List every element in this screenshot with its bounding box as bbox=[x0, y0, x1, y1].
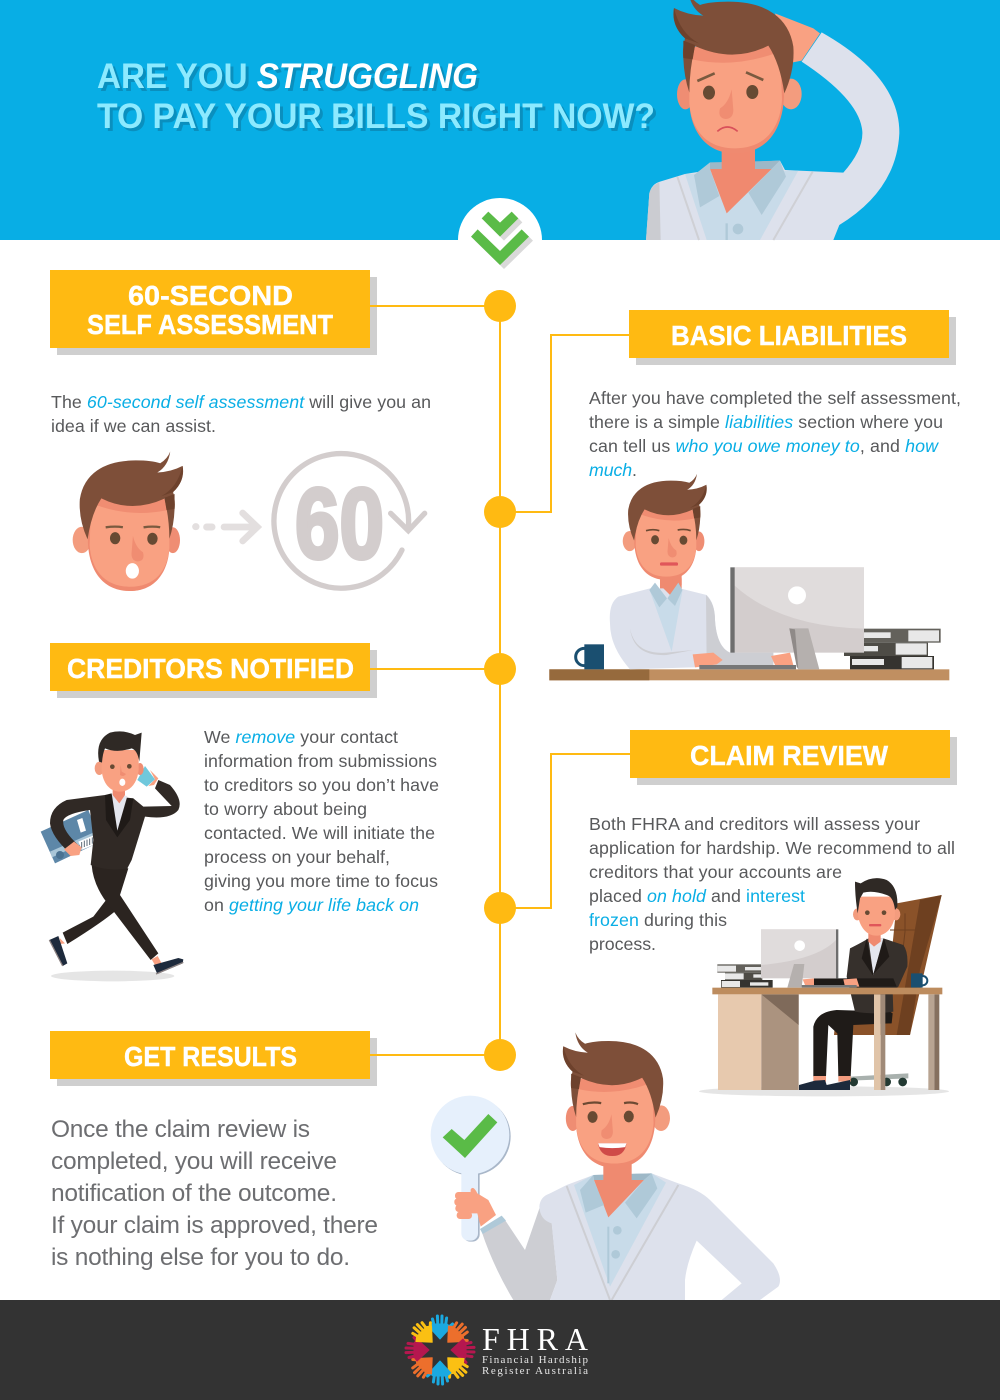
text: self assessment bbox=[51, 392, 431, 436]
text: claim review: frozen during this bbox=[589, 910, 727, 930]
text: claim review: placed on hold and interest bbox=[589, 886, 805, 906]
heading: 60-second self assessment: 60-SECOND bbox=[128, 280, 293, 311]
book bbox=[41, 810, 101, 863]
computer bbox=[699, 567, 864, 669]
jacket and arms bbox=[50, 780, 180, 869]
arm bbox=[482, 1207, 557, 1300]
character: man at computer bbox=[549, 474, 949, 680]
text: creditors notified: on getting your life back on bbox=[204, 895, 419, 915]
text: creditors notified: giving you more time to focus bbox=[204, 871, 438, 891]
text: get results: is nothing else for you to do. bbox=[51, 1244, 350, 1271]
man bbox=[610, 570, 793, 669]
text: creditors notified bbox=[204, 727, 439, 915]
head bbox=[853, 878, 900, 947]
character: happy man with check sign bbox=[431, 1096, 780, 1300]
text: creditors notified: to creditors so you don’t have bbox=[204, 775, 439, 795]
character: worried man scratching head bbox=[646, 0, 899, 240]
text: claim review: Both FHRA and creditors will assess your bbox=[589, 814, 920, 834]
chair bbox=[834, 895, 942, 1086]
text: claim review: application for hardship. We recommend to all bbox=[589, 838, 955, 858]
shoes bbox=[49, 936, 183, 974]
text: get results: completed, you will receive bbox=[51, 1148, 337, 1175]
heading: get results bbox=[50, 1031, 377, 1086]
head bbox=[95, 731, 144, 803]
footer band bbox=[0, 1300, 1000, 1400]
man bbox=[799, 938, 907, 1090]
book stack bbox=[844, 629, 941, 669]
computer bbox=[761, 929, 857, 988]
text: creditors notified: We remove your contact bbox=[204, 727, 398, 747]
icon: dotted arrow bbox=[196, 513, 257, 541]
header title: ARE YOU STRUGGLING bbox=[97, 57, 478, 96]
header band bbox=[0, 0, 1000, 240]
icon: mug bbox=[576, 644, 604, 669]
text: get results: Once the claim review is bbox=[51, 1116, 310, 1143]
legs bbox=[63, 865, 158, 960]
text: basic liabilities: there is a simple liabilities section where you bbox=[589, 412, 943, 432]
heading: basic liabilities: BASIC LIABILITIES bbox=[671, 320, 907, 351]
icon: check sign bbox=[431, 1096, 511, 1242]
header title: ARE YOU STRUGGLING bbox=[100, 60, 481, 99]
logo: FHRA wordmark: Financial Hardship bbox=[482, 1354, 588, 1366]
heading: claim review bbox=[630, 730, 957, 785]
raised hand bbox=[454, 1188, 496, 1227]
text: basic liabilities: can tell us who you owe money to, and how bbox=[589, 436, 939, 456]
head: happy man bbox=[563, 1032, 670, 1168]
heading: 60-second self assessment bbox=[50, 270, 377, 355]
text: basic liabilities: much. bbox=[589, 460, 637, 480]
heading: basic liabilities bbox=[629, 310, 956, 365]
heading: claim review: CLAIM REVIEW bbox=[690, 740, 888, 771]
character: man at desk with chair bbox=[699, 878, 949, 1096]
heading: creditors notified bbox=[50, 643, 377, 698]
timeline connector bbox=[370, 290, 630, 1071]
desk bbox=[712, 988, 942, 1090]
header title: TO PAY YOUR BILLS RIGHT NOW? bbox=[100, 100, 658, 139]
text: basic liabilities bbox=[589, 388, 961, 480]
text: get results: notification of the outcome. bbox=[51, 1180, 337, 1207]
books bbox=[717, 964, 773, 988]
icon: double chevron badge bbox=[458, 198, 542, 269]
text: claim review: creditors that your accounts are bbox=[589, 862, 842, 882]
logo: FHRA wordmark: Register Australia bbox=[482, 1365, 588, 1377]
text: get results: If your claim is approved, there bbox=[51, 1212, 378, 1239]
text: creditors notified: process on your behalf, bbox=[204, 847, 390, 867]
logo: FHRA wordmark: FHRA bbox=[482, 1321, 588, 1357]
desk top bbox=[549, 669, 949, 680]
text: get results bbox=[51, 1116, 378, 1271]
icon: 60 second timer: 60 bbox=[295, 468, 384, 580]
text: claim review bbox=[589, 814, 955, 954]
heading: get results: GET RESULTS bbox=[124, 1041, 297, 1072]
heading: creditors notified: CREDITORS NOTIFIED bbox=[67, 653, 354, 684]
text: creditors notified: information from submissions bbox=[204, 751, 437, 771]
header title bbox=[97, 57, 658, 139]
phone bbox=[137, 766, 155, 787]
cardigan bbox=[539, 1173, 780, 1300]
text: basic liabilities: After you have completed the self assessment, bbox=[589, 388, 961, 408]
character: surprised face bbox=[73, 452, 183, 591]
text: self assessment: idea if we can assist. bbox=[51, 416, 216, 436]
text: creditors notified: to worry about being bbox=[204, 799, 367, 819]
text: creditors notified: contacted. We will initiate the bbox=[204, 823, 435, 843]
text: claim review: process. bbox=[589, 934, 656, 954]
heading: 60-second self assessment: SELF ASSESSMENT bbox=[87, 309, 333, 340]
logo: hands star bbox=[406, 1316, 474, 1384]
mug bbox=[911, 973, 927, 988]
character: running man on phone bbox=[41, 731, 183, 981]
text: self assessment: The 60-second self assessment will give you an bbox=[51, 392, 431, 412]
logo: FHRA wordmark bbox=[482, 1321, 588, 1377]
icon: 60 second timer bbox=[274, 454, 425, 588]
header title: TO PAY YOUR BILLS RIGHT NOW? bbox=[97, 97, 655, 136]
